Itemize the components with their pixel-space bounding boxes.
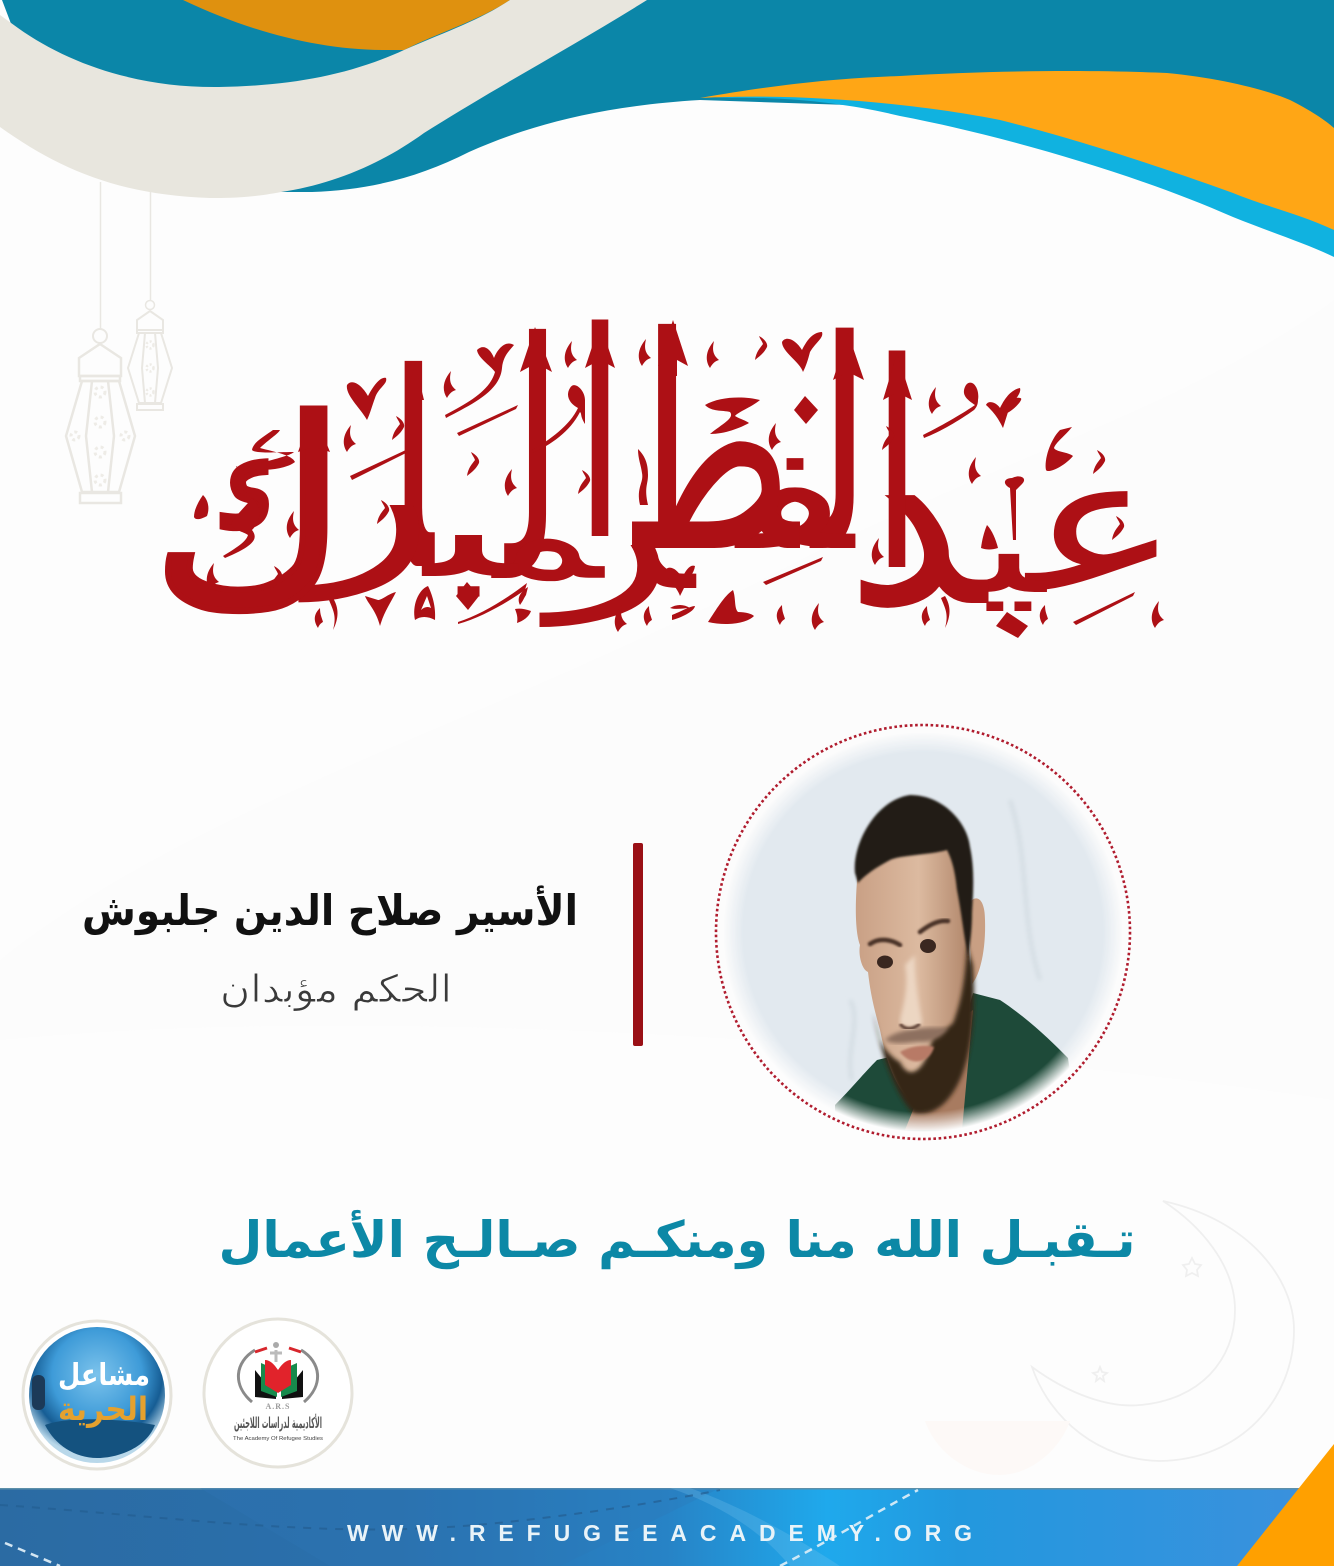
logo: Academy of Refugee Studies: الأكاديمية لدراسات اللاجئين (234, 1414, 322, 1432)
word: الفطر: ‍ف‍ (735, 399, 856, 586)
faint background sweep (0, 300, 1334, 1100)
word: الفطر: ‍ط‍ (632, 275, 801, 618)
word: عيد (844, 362, 1183, 665)
portrait photo (715, 724, 1131, 1140)
top orange wave (183, 0, 510, 50)
word: عيد: ‍د (844, 362, 992, 665)
sentence label: الحكم مؤبدان (220, 967, 452, 1012)
photo drawing (730, 738, 1116, 1132)
right orange wave (700, 71, 1334, 230)
word: المبارك: ا (584, 273, 616, 604)
crescent moon and stars (1032, 1201, 1294, 1461)
right light-blue wave (715, 95, 1334, 257)
word: المبارك: ‍ا (396, 317, 435, 631)
faint semicircle (925, 1421, 1070, 1475)
footer orange corner (1237, 1444, 1334, 1566)
word: الفطر: ‍ر (539, 440, 697, 627)
word: الفطر: ل‍ (809, 279, 872, 617)
logo: Mashael al-Hurriya (23, 1321, 171, 1469)
wreath arcs (238, 1350, 318, 1402)
divider bar (633, 843, 643, 1046)
word: المبارك: ل‍ (503, 277, 564, 649)
open book (255, 1370, 303, 1399)
heading: Eid al-Fitr calligraphy (151, 273, 1183, 665)
logo title white: مشاعل (58, 1358, 150, 1393)
word: المبارك: ك (151, 365, 349, 665)
top wave banner (0, 0, 1334, 257)
word: عيد: ‍ي‍ (973, 472, 1048, 623)
word: الفطر: ا (881, 304, 913, 635)
dotted ring (716, 725, 1130, 1139)
English academy name: The Academy Of Refugee Studies (233, 1436, 323, 1442)
cream wave (0, 0, 647, 198)
A.R.S label: A.R.S (265, 1402, 291, 1411)
footer website: WWW.REFUGEEACADEMY.ORG (347, 1520, 972, 1546)
word: الفطر (539, 275, 913, 635)
word: عيد: ع‍ (1024, 414, 1183, 635)
word: المبارك (151, 273, 616, 665)
word: المبارك: ر (298, 380, 435, 603)
prisoner name: الأسير صلاح الدين جلبوش (82, 885, 578, 936)
word: المبارك: ‍م‍ (491, 458, 605, 609)
calligraphy ornaments (194, 320, 1164, 638)
word: المبارك: ‍ب‍ (421, 447, 518, 609)
footer band (0, 1444, 1334, 1566)
logo: Academy of Refugee Studies (204, 1319, 352, 1467)
blessing line: تـقبـل الله منا ومنكـم صـالـح الأعمال (218, 1209, 1136, 1270)
icon: hanging lanterns (66, 182, 172, 503)
logo title orange: الحرية (58, 1390, 148, 1428)
